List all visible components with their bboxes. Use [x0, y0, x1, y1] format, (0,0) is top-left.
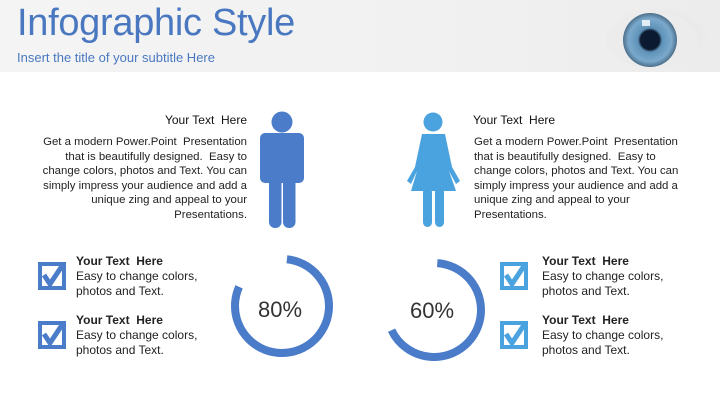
checkbox item 1: Your Text Here	[76, 254, 163, 268]
checkbox item 4: Your Text Here	[542, 313, 629, 327]
checkbox item 4: Easy to change colors,	[542, 328, 663, 342]
right paragraph: Get a modern Power.Point Presentation that is beautifully designed. Easy to change colors, photos and Text. You can simply impress your audience and add a unique zing and appeal to your Presentations.	[474, 136, 678, 221]
chart: 80% ring	[231, 255, 333, 357]
checkbox item 3: Easy to change colors,	[542, 269, 663, 283]
checklist left	[38, 254, 197, 357]
checkbox item 2: photos and Text.	[76, 343, 164, 357]
chart: 80% ring: 80%	[258, 297, 302, 322]
subtitle: Insert the title of your subtitle Here	[17, 50, 215, 65]
checkbox item 2: Easy to change colors,	[76, 328, 197, 342]
right heading: Your Text Here	[473, 113, 555, 127]
icon: eye	[623, 13, 677, 67]
checkbox item 1	[38, 254, 197, 298]
left paragraph: Get a modern Power.Point Presentation that is beautifully designed. Easy to change colors, photos and Text. You can simply impress your audience and add a unique zing and appeal to your Presentations.	[43, 136, 247, 221]
icon: woman	[407, 112, 460, 227]
checkbox item 4	[500, 313, 663, 357]
header band	[0, 0, 720, 72]
checkbox item 4: photos and Text.	[542, 343, 630, 357]
checkbox item 2: Your Text Here	[76, 313, 163, 327]
checkbox item 3	[500, 254, 663, 298]
checkbox item 1: photos and Text.	[76, 284, 164, 298]
chart: 60% ring: 60%	[410, 298, 454, 323]
checkbox item 3: photos and Text.	[542, 284, 630, 298]
checklist right	[500, 254, 663, 357]
checkbox item 3: Your Text Here	[542, 254, 629, 268]
checkbox item 2	[38, 313, 197, 357]
chart: 60% ring	[388, 259, 485, 361]
left heading: Your Text Here	[165, 113, 247, 127]
icon: man	[260, 112, 304, 228]
checkbox item 1: Easy to change colors,	[76, 269, 197, 283]
title: Infographic Style	[17, 2, 295, 44]
